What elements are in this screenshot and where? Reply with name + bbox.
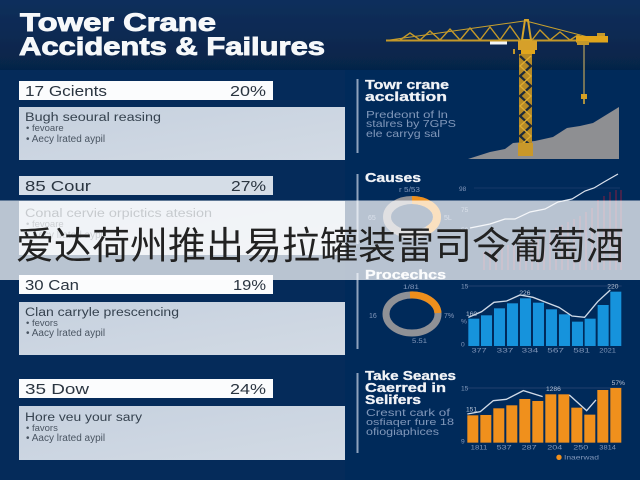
panel: crane note: ele carryg sal — [366, 128, 440, 140]
chart: blue bars and line: 581 — [573, 348, 590, 355]
chart: blue bars and line: 0 — [461, 342, 465, 349]
chart: orange bars and line: 204 — [547, 444, 563, 451]
panel: stat 1: • Aecy lrated aypil — [26, 134, 105, 145]
panel: stat 3: 30 Can — [25, 277, 79, 294]
title: Accidents & Failures — [19, 33, 325, 61]
chart: orange bars and line: 15 — [461, 385, 469, 392]
panel: processes — [356, 268, 454, 349]
chart: blue bars and line: 226 — [519, 290, 531, 297]
chart: blue bars and line: 377 — [472, 348, 487, 355]
panel: causes: Causes — [365, 171, 421, 185]
chart: causes bars and line: 75 — [461, 207, 469, 214]
chart: orange bars and line — [461, 380, 625, 462]
panel: processes: 7% — [444, 313, 454, 320]
panel: stat 4: • Aacy lrated aypil — [26, 433, 105, 444]
panel: stat 2: 27% — [231, 178, 266, 195]
panel: stat 2: Conal cervie orpictics atesion — [25, 208, 212, 220]
panel: stat 2: • fevoare — [26, 219, 64, 230]
panel: crane note: stalres by 7GPS — [366, 118, 456, 130]
chart: blue bars and line: 567 — [547, 348, 564, 355]
panel: take seances: Cresnt cark of — [366, 407, 450, 419]
panel: stat 1 — [19, 81, 345, 160]
right panel backing — [345, 70, 640, 480]
chart: orange bars and line: 537 — [497, 444, 512, 451]
caption band: 爱达荷州推出易拉罐装雷司令葡萄酒 — [16, 226, 624, 268]
panel: causes: 65 — [368, 215, 376, 222]
panel: stat 3 — [19, 275, 345, 355]
panel: stat 4: Hore veu your sary — [25, 412, 142, 424]
panel: stat 3: • fevors — [26, 318, 58, 329]
chart: orange bars and line: 57% — [612, 380, 625, 387]
panel: processes: 16 — [369, 313, 377, 320]
panel: take seances: Caerred in — [365, 381, 446, 395]
panel: crane note: Predeont of ln — [366, 109, 448, 121]
chart: blue bars and line: 15 — [461, 283, 469, 290]
legend — [556, 455, 599, 462]
panel: stat 4: 35 Dow — [25, 381, 89, 398]
panel: stat 2: • Aecy lrated aypil — [26, 230, 105, 241]
chart: causes bars and line: 50 — [461, 227, 469, 234]
chart: orange bars and line: 250 — [573, 444, 589, 451]
chart: blue bars and line: 334 — [522, 348, 539, 355]
chart: causes donut — [387, 200, 437, 234]
chart: orange bars and line: 287 — [522, 444, 537, 451]
caption band — [0, 200, 640, 280]
panel: stat 1: 20% — [230, 83, 266, 100]
panel: processes: 1/81 — [403, 284, 419, 291]
panel: stat 3: Clan carryle prescencing — [25, 307, 179, 319]
panel: stat 1: Bugh seoural reasing — [25, 112, 161, 124]
legend: Inaerwad — [564, 455, 599, 462]
panel: stat 2 — [19, 176, 345, 255]
panel: causes: r 5/53 — [399, 187, 420, 194]
chart: processes donut — [386, 295, 438, 333]
chart: blue bars and line: 337 — [497, 348, 514, 355]
panel: causes — [356, 171, 452, 244]
panel: crane note — [356, 78, 456, 153]
panel: processes: Procechcs — [365, 268, 446, 282]
panel: crane note: Towr crane — [365, 78, 449, 92]
panel: take seances: Take Seanes — [365, 369, 456, 383]
chart: orange bars and line: 9 — [461, 439, 465, 446]
panel: stat 3: 19% — [233, 277, 266, 294]
panel: stat 2: 85 Cour — [25, 178, 91, 195]
chart: blue bars and line: 160 — [466, 311, 477, 318]
panel: stat 3: • Aacy lrated aypil — [26, 328, 105, 339]
panel: stat 4: • favors — [26, 423, 58, 434]
panel: causes: 5L — [444, 215, 452, 222]
panel: take seances: ofiogiaphices — [366, 426, 439, 438]
panel: take seances: Selifers — [365, 393, 421, 407]
chart: orange bars and line: 151 — [466, 407, 477, 414]
panel: take seances: osfiaqer fure 18 — [366, 417, 454, 428]
title: Tower Crane — [20, 9, 216, 37]
panel: stat 1: 17 Gcients — [25, 83, 107, 100]
panel: take seances — [356, 369, 456, 453]
panel: stat 1: • fevoare — [26, 123, 64, 134]
chart: blue bars and line: 220 — [607, 284, 619, 291]
panel: processes: 5.51 — [412, 338, 427, 345]
panel: crane note: acclattion — [365, 90, 447, 104]
chart: orange bars and line: 3814 — [599, 444, 616, 451]
chart: orange bars and line: 1286 — [546, 386, 561, 393]
header band — [0, 0, 640, 70]
title — [19, 9, 325, 61]
panel: stat 4 — [19, 379, 345, 460]
chart: blue bars and line: 2021 — [599, 348, 616, 355]
chart: causes bars and line: 98 — [459, 186, 467, 193]
chart: grey area — [468, 107, 619, 159]
panel: stat 4: 24% — [230, 381, 266, 398]
chart: blue bars and line: % — [461, 318, 467, 325]
icon: tower crane — [386, 20, 608, 156]
chart: causes bars and line — [459, 174, 621, 270]
chart: blue bars and line — [461, 283, 622, 355]
chart: orange bars and line: 1811 — [471, 444, 488, 451]
